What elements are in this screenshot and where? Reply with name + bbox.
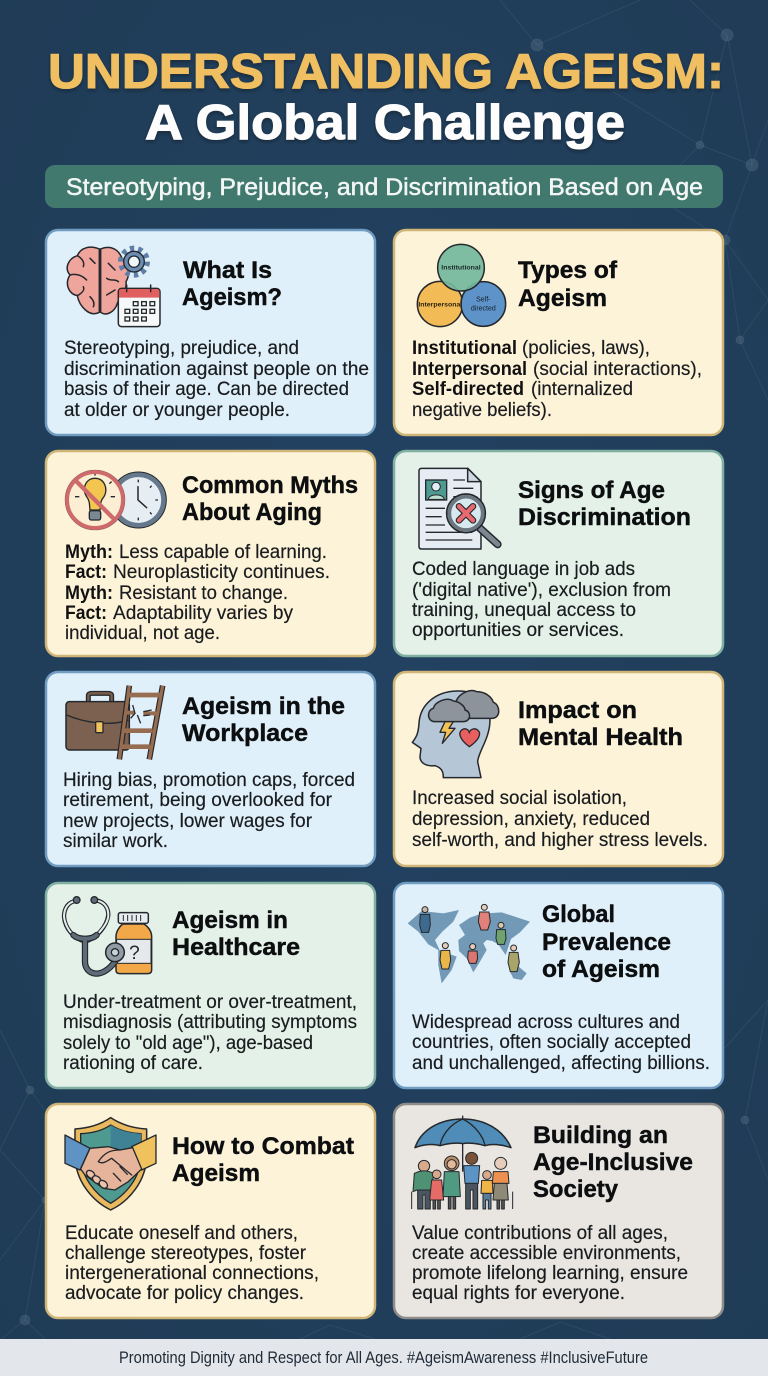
heading: of Ageism [542, 956, 660, 983]
body text: Resistant to change. [119, 583, 288, 604]
heading: Signs of Age [518, 477, 665, 504]
subtitle banner [45, 165, 723, 208]
body text: and unchallenged, affecting billions. [412, 1053, 710, 1074]
body text: Myth: [65, 583, 113, 604]
heading [542, 901, 671, 983]
body text: intergenerational connections, [65, 1263, 319, 1284]
heading: Healthcare [172, 934, 300, 961]
heading: Prevalence [542, 929, 671, 956]
body text: Educate oneself and others, [65, 1223, 298, 1244]
heading: Society [533, 1176, 618, 1203]
icon: stethoscope and pill bottle [64, 897, 152, 974]
body text: Under-treatment or over-treatment, [63, 992, 357, 1013]
body text: advocate for policy changes. [65, 1283, 304, 1304]
icon: stethoscope and pill bottle: ? [129, 943, 140, 964]
title [48, 45, 724, 150]
footer [0, 1339, 768, 1376]
body text: (internalized [531, 379, 633, 400]
heading: Ageism [518, 285, 607, 312]
body text: countries, often socially accepted [412, 1032, 691, 1053]
heading: Impact on [518, 697, 637, 724]
icon: document with magnifier [419, 468, 498, 549]
heading [518, 477, 691, 531]
body text: depression, anxiety, reduced [412, 809, 650, 830]
heading [533, 1122, 693, 1203]
body text [412, 1223, 688, 1304]
icon: head with storm clouds and heart [412, 691, 499, 778]
icon: venn diagram: Self- [476, 297, 491, 304]
heading: Age-Inclusive [533, 1149, 693, 1176]
body text [412, 338, 702, 421]
body text [65, 542, 330, 644]
heading: Ageism [172, 1160, 260, 1187]
heading: Ageism in [172, 907, 288, 934]
heading [182, 257, 282, 311]
body text [64, 338, 369, 421]
body text: basis of their age. Can be directed [64, 379, 349, 400]
icon: venn diagram [417, 244, 506, 327]
heading: Discrimination [518, 504, 691, 531]
panel: global prevalence [394, 883, 723, 1088]
footer: Promoting Dignity and Respect for All Ages. #AgeismAwareness #InclusiveFuture [119, 1348, 648, 1367]
heading [518, 697, 683, 751]
heading: About Aging [182, 499, 322, 526]
icon: venn diagram: Interpersonal [418, 301, 462, 308]
icon: shield and handshake [65, 1118, 156, 1210]
body text: Adaptability varies by [113, 603, 293, 624]
body text: promote lifelong learning, ensure [412, 1263, 688, 1284]
body text: opportunities or services. [412, 620, 624, 641]
body text: Widespread across cultures and [412, 1012, 680, 1033]
heading: How to Combat [172, 1133, 354, 1160]
title: UNDERSTANDING AGEISM: [48, 45, 724, 99]
body text: Neuroplasticity continues. [113, 562, 330, 583]
body text: Interpersonal [412, 359, 527, 380]
icon: umbrella over family [412, 1116, 513, 1209]
body text: self-worth, and higher stress levels. [412, 830, 708, 851]
body text: Stereotyping, prejudice, and [64, 338, 299, 359]
subtitle banner: Stereotyping, Prejudice, and Discrimination Based on Age [66, 174, 703, 201]
body text: Value contributions of all ages, [412, 1223, 668, 1244]
panel: signs of age discrimination [394, 451, 723, 656]
body text: (policies, laws), [522, 338, 650, 359]
body text [412, 559, 671, 641]
panel: what is ageism [46, 230, 375, 435]
body text: training, unequal access to [412, 600, 636, 621]
panel: ageism in the workplace [46, 672, 375, 866]
title: A Global Challenge [145, 96, 625, 150]
heading: Common Myths [182, 472, 358, 499]
body text: Self-directed [412, 379, 524, 400]
panel: impact on mental health [394, 672, 723, 866]
heading: Workplace [182, 720, 308, 747]
icon: venn diagram: directed [471, 305, 496, 312]
heading: Ageism in the [182, 693, 345, 720]
body text: Fact: [65, 562, 107, 583]
icon: venn diagram: Institutional [441, 265, 481, 272]
heading [172, 907, 300, 961]
body text [412, 1012, 710, 1074]
body text: equal rights for everyone. [412, 1283, 625, 1304]
heading [518, 257, 618, 312]
heading: What Is [183, 257, 272, 284]
body text: solely to "old age"), age-based [63, 1033, 313, 1054]
body text: Fact: [65, 603, 107, 624]
body text: rationing of care. [63, 1053, 203, 1074]
icon: crossed bulb and clock [65, 470, 166, 530]
panel: how to combat ageism [46, 1104, 375, 1318]
body text: new projects, lower wages for [63, 811, 313, 832]
panel: ageism in healthcare [46, 883, 375, 1088]
body text: misdiagnosis (attributing symptoms [63, 1012, 357, 1033]
heading: Mental Health [518, 724, 683, 751]
body text: challenge stereotypes, foster [65, 1243, 307, 1264]
body text: discrimination against people on the [64, 359, 369, 380]
heading: Types of [518, 257, 618, 284]
icon: brain with gear and calendar [67, 247, 160, 327]
icon: world map with people [408, 904, 530, 983]
body text: Increased social isolation, [412, 788, 627, 809]
body text: Institutional [412, 338, 517, 359]
body text: Coded language in job ads [412, 559, 635, 580]
body text: similar work. [63, 831, 168, 852]
panel: common myths [46, 451, 375, 656]
body text: Myth: [65, 542, 113, 563]
heading [172, 1133, 354, 1187]
panel: building an age-inclusive society [394, 1104, 723, 1318]
heading: Global [542, 901, 615, 928]
body text: ('digital native'), exclusion from [412, 580, 671, 601]
body text [412, 788, 708, 851]
body text: at older or younger people. [64, 400, 290, 421]
body text: individual, not age. [65, 623, 220, 644]
body text: retirement, being overlooked for [63, 790, 333, 811]
heading: Ageism? [182, 284, 282, 311]
panel: types of ageism [394, 230, 723, 435]
body text: create accessible environments, [412, 1243, 681, 1264]
body text: (social interactions), [533, 359, 702, 380]
body text: Less capable of learning. [119, 542, 327, 563]
body text [65, 1223, 319, 1304]
body text [63, 992, 357, 1074]
heading [182, 472, 358, 526]
heading: Building an [533, 1122, 668, 1149]
body text: negative beliefs). [412, 400, 552, 421]
body text [63, 770, 355, 852]
body text: Hiring bias, promotion caps, forced [63, 770, 355, 791]
heading [182, 693, 345, 747]
icon: briefcase and broken ladder [66, 686, 163, 759]
